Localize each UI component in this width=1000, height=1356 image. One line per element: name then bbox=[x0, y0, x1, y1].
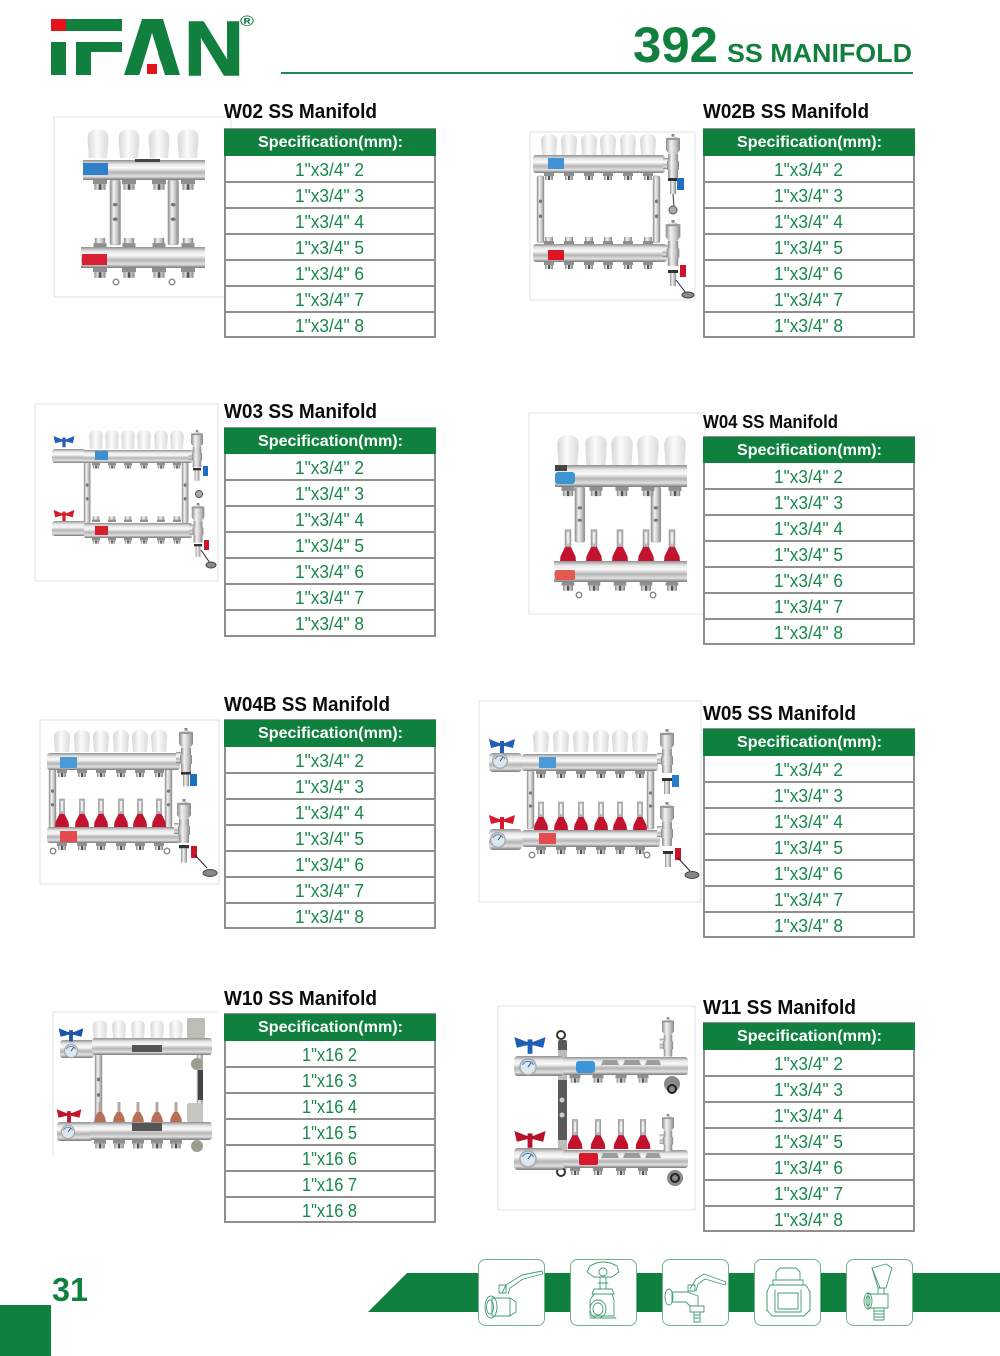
logo: IFAN: I bbox=[46, 6, 72, 92]
logo: IFAN: N bbox=[184, 6, 244, 92]
product photo: W02 bbox=[54, 117, 231, 297]
table: W05 specifications: 1"x3/4" 5 bbox=[774, 838, 843, 858]
table: W04B specifications: 1"x3/4" 6 bbox=[295, 855, 364, 875]
table: W04B specifications bbox=[224, 720, 436, 928]
table: W03 specifications: Specification(mm): bbox=[258, 433, 403, 450]
table: W03 specifications: 1"x3/4" 2 bbox=[295, 458, 364, 478]
table: W04 specifications: 1"x3/4" 3 bbox=[774, 493, 843, 513]
table: W11 specifications: 1"x3/4" 2 bbox=[774, 1054, 843, 1074]
icon card: gate valve bbox=[570, 1260, 636, 1326]
title: W05: W05 SS Manifold bbox=[703, 703, 856, 725]
table: W05 specifications: 1"x3/4" 4 bbox=[774, 812, 843, 832]
table: W03 specifications: 1"x3/4" 7 bbox=[295, 588, 364, 608]
product photo: W02B bbox=[530, 132, 695, 300]
table: W03 specifications: 1"x3/4" 5 bbox=[295, 536, 364, 556]
product photo: W04 bbox=[529, 413, 705, 614]
title: W04B: W04B SS Manifold bbox=[224, 694, 390, 716]
footer corner block bbox=[0, 1305, 51, 1356]
table: W02 specifications: 1"x3/4" 8 bbox=[295, 316, 364, 336]
table: W04B specifications: 1"x3/4" 4 bbox=[295, 803, 364, 823]
logo: IFAN: A bbox=[123, 6, 181, 92]
table: W02 specifications bbox=[224, 129, 436, 337]
table: W10 specifications: Specification(mm): bbox=[258, 1019, 403, 1036]
table: W02 specifications: 1"x3/4" 7 bbox=[295, 290, 364, 310]
table: W04 specifications: 1"x3/4" 6 bbox=[774, 571, 843, 591]
logo: IFAN bbox=[45, 6, 254, 92]
icon card: ball valve bbox=[478, 1260, 544, 1326]
table: W02B specifications: 1"x3/4" 4 bbox=[774, 212, 843, 232]
table: W05 specifications: 1"x3/4" 2 bbox=[774, 760, 843, 780]
icon card: angle valve bbox=[846, 1260, 912, 1326]
header rule bbox=[281, 72, 913, 74]
table: W11 specifications: 1"x3/4" 4 bbox=[774, 1106, 843, 1126]
table: W11 specifications: 1"x3/4" 6 bbox=[774, 1158, 843, 1178]
table: W04B specifications: 1"x3/4" 7 bbox=[295, 881, 364, 901]
page heading bbox=[633, 17, 912, 73]
page number: 31 bbox=[52, 1271, 88, 1308]
product photo: W03 bbox=[35, 404, 218, 581]
table: W02B specifications: Specification(mm): bbox=[737, 134, 882, 151]
table: W02B specifications: 1"x3/4" 3 bbox=[774, 186, 843, 206]
table: W10 specifications: 1"x16 3 bbox=[302, 1071, 357, 1091]
table: W10 specifications bbox=[224, 1014, 436, 1222]
table: W11 specifications bbox=[703, 1023, 915, 1231]
table: W10 specifications: 1"x16 4 bbox=[302, 1097, 357, 1117]
table: W02 specifications: Specification(mm): bbox=[258, 134, 403, 151]
product photo: W10 bbox=[53, 1012, 218, 1157]
table: W02B specifications: 1"x3/4" 7 bbox=[774, 290, 843, 310]
table: W02B specifications bbox=[703, 129, 915, 337]
title: W11: W11 SS Manifold bbox=[703, 997, 856, 1019]
table: W03 specifications: 1"x3/4" 4 bbox=[295, 510, 364, 530]
table: W02 specifications: 1"x3/4" 6 bbox=[295, 264, 364, 284]
title: W02B: W02B SS Manifold bbox=[703, 101, 869, 123]
table: W11 specifications: 1"x3/4" 3 bbox=[774, 1080, 843, 1100]
table: W02B specifications: 1"x3/4" 6 bbox=[774, 264, 843, 284]
title: W04: W04 SS Manifold bbox=[703, 412, 838, 432]
table: W11 specifications: Specification(mm): bbox=[737, 1028, 882, 1045]
table: W03 specifications: 1"x3/4" 3 bbox=[295, 484, 364, 504]
table: W11 specifications: 1"x3/4" 8 bbox=[774, 1210, 843, 1230]
table: W02B specifications: 1"x3/4" 2 bbox=[774, 160, 843, 180]
icon card: check valve bbox=[754, 1260, 820, 1326]
table: W04 specifications: 1"x3/4" 2 bbox=[774, 467, 843, 487]
table: W05 specifications: 1"x3/4" 3 bbox=[774, 786, 843, 806]
table: W02 specifications: 1"x3/4" 5 bbox=[295, 238, 364, 258]
table: W04B specifications: Specification(mm): bbox=[258, 725, 403, 742]
page heading: 392 bbox=[633, 17, 718, 73]
footer green band bbox=[368, 1273, 1000, 1312]
product photo: W04B bbox=[40, 720, 219, 884]
table: W04 specifications: Specification(mm): bbox=[737, 442, 882, 459]
table: W04B specifications: 1"x3/4" 5 bbox=[295, 829, 364, 849]
table: W04 specifications: 1"x3/4" 8 bbox=[774, 623, 843, 643]
table: W04B specifications: 1"x3/4" 3 bbox=[295, 777, 364, 797]
title: W10: W10 SS Manifold bbox=[224, 988, 377, 1010]
table: W02B specifications: 1"x3/4" 5 bbox=[774, 238, 843, 258]
table: W11 specifications: 1"x3/4" 7 bbox=[774, 1184, 843, 1204]
table: W10 specifications: 1"x16 6 bbox=[302, 1149, 357, 1169]
title: W03: W03 SS Manifold bbox=[224, 401, 377, 423]
table: W05 specifications: 1"x3/4" 8 bbox=[774, 916, 843, 936]
table: W10 specifications: 1"x16 5 bbox=[302, 1123, 357, 1143]
table: W04 specifications: 1"x3/4" 7 bbox=[774, 597, 843, 617]
table: W02B specifications: 1"x3/4" 8 bbox=[774, 316, 843, 336]
icon card: bibcock bbox=[662, 1260, 728, 1326]
table: W05 specifications: Specification(mm): bbox=[737, 734, 882, 751]
table: W04B specifications: 1"x3/4" 2 bbox=[295, 751, 364, 771]
table: W05 specifications: 1"x3/4" 6 bbox=[774, 864, 843, 884]
table: W04 specifications: 1"x3/4" 5 bbox=[774, 545, 843, 565]
title: W02: W02 SS Manifold bbox=[224, 101, 377, 123]
table: W05 specifications: 1"x3/4" 7 bbox=[774, 890, 843, 910]
table: W04B specifications: 1"x3/4" 8 bbox=[295, 907, 364, 927]
table: W03 specifications: 1"x3/4" 6 bbox=[295, 562, 364, 582]
logo: IFAN: ® bbox=[240, 13, 254, 30]
table: W02 specifications: 1"x3/4" 3 bbox=[295, 186, 364, 206]
table: W02 specifications: 1"x3/4" 4 bbox=[295, 212, 364, 232]
table: W05 specifications bbox=[703, 729, 915, 937]
table: W10 specifications: 1"x16 8 bbox=[302, 1201, 357, 1221]
table: W03 specifications bbox=[224, 428, 436, 636]
table: W10 specifications: 1"x16 2 bbox=[302, 1045, 357, 1065]
table: W04 specifications bbox=[703, 437, 915, 644]
product photo: W05 bbox=[479, 701, 701, 902]
table: W10 specifications: 1"x16 7 bbox=[302, 1175, 357, 1195]
table: W04 specifications: 1"x3/4" 4 bbox=[774, 519, 843, 539]
table: W03 specifications: 1"x3/4" 8 bbox=[295, 614, 364, 634]
product photo: W11 bbox=[498, 1006, 695, 1210]
table: W11 specifications: 1"x3/4" 5 bbox=[774, 1132, 843, 1152]
table: W02 specifications: 1"x3/4" 2 bbox=[295, 160, 364, 180]
page heading: SS MANIFOLD bbox=[727, 38, 912, 68]
